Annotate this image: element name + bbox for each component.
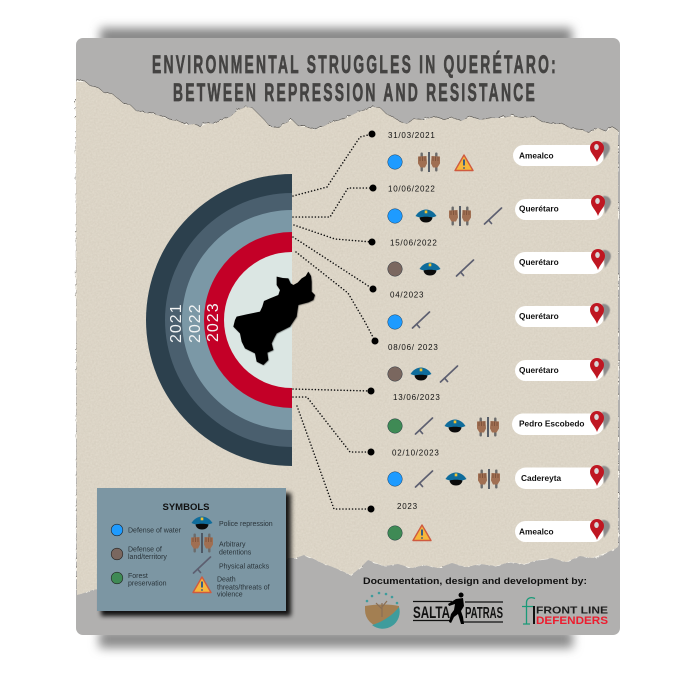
event 3: 15/06/2022 Querétaro: 15/06/2022 (390, 238, 438, 248)
event 8: 2023 Amealco: 2023 (397, 502, 418, 511)
legend entries: Forest (128, 573, 148, 580)
logo: Bosque del Agua (365, 592, 400, 629)
torn paper background (76, 78, 619, 600)
event 7: 02/10/2023 Cadereyta (368, 448, 610, 489)
legend panel: symbols (97, 488, 291, 616)
legend entries: detentions (219, 550, 252, 556)
bottom shadow (99, 630, 573, 648)
map of Querétaro (233, 272, 315, 365)
dotted connectors (293, 134, 375, 509)
legend entries: Arbitrary (219, 542, 246, 548)
event 3: 15/06/2022 Querétaro (368, 238, 611, 276)
top shadow (100, 28, 572, 46)
legend heading: SYMBOLS (163, 502, 209, 513)
title (152, 50, 558, 107)
logo: Front Line Defenders (522, 598, 608, 627)
event 1: 31/03/2021 Amealco (368, 130, 610, 172)
event 6: 13/06/2023 Pedro Escobedo: Pedro Escobedo (519, 418, 584, 428)
logo: Salta Patras: PATRAS (465, 605, 503, 622)
logo: Front Line Defenders: DEFENDERS (536, 615, 608, 627)
event 7: 02/10/2023 Cadereyta: 02/10/2023 (392, 448, 440, 458)
year labels (168, 302, 222, 343)
year labels: 2022 (187, 303, 204, 343)
event 5: 08/06/2023 Querétaro: Querétaro (519, 365, 559, 375)
runner figure (448, 593, 464, 624)
event 4: 04/2023 Querétaro: 04/2023 (390, 290, 424, 300)
legend entries (111, 516, 273, 598)
event 6: 13/06/2023 Pedro Escobedo: 13/06/2023 (393, 393, 441, 402)
event 5: 08/06/2023 Querétaro: 08/06/ 2023 (388, 343, 439, 352)
legend entries: preservation (128, 580, 167, 588)
event 3: 15/06/2022 Querétaro: Querétaro (519, 257, 559, 267)
logo: Salta Patras (413, 593, 503, 624)
logo: Salta Patras: SALTA (413, 603, 450, 622)
event 8: 2023 Amealco (368, 502, 610, 542)
legend entries: Defense of (128, 546, 162, 554)
event 1: 31/03/2021 Amealco: Amealco (519, 150, 554, 160)
event 6: 13/06/2023 Pedro Escobedo (368, 388, 610, 437)
event 5: 08/06/2023 Querétaro (372, 338, 610, 382)
event 4: 04/2023 Querétaro: Querétaro (519, 311, 559, 321)
event 8: 2023 Amealco: Amealco (519, 526, 554, 536)
event 2: 10/06/2022 Querétaro: 10/06/2022 (388, 184, 436, 194)
semicircle timeline chart (146, 174, 292, 466)
event 2: 10/06/2022 Querétaro (370, 184, 611, 226)
year labels: 2021 (168, 303, 185, 343)
legend entries: Death (217, 576, 236, 584)
event 1: 31/03/2021 Amealco: 31/03/2021 (388, 131, 436, 140)
legend entries: land/territory (128, 554, 167, 561)
logo: Front Line Defenders: FRONT LINE (536, 604, 608, 616)
event 4: 04/2023 Querétaro (370, 286, 610, 329)
legend entries: Physical attacks (219, 564, 270, 570)
legend entries: violence (217, 592, 243, 598)
legend entries: Police repression (219, 521, 273, 528)
legend entries: threats/threats of (217, 584, 270, 592)
year labels: 2023 (205, 302, 222, 342)
credits heading: Documentation, design and development by: (363, 576, 587, 587)
event 2: 10/06/2022 Querétaro: Querétaro (519, 204, 559, 214)
legend entries: Defense of water (128, 528, 182, 534)
event 7: 02/10/2023 Cadereyta: Cadereyta (521, 473, 562, 483)
grey card (76, 38, 620, 635)
